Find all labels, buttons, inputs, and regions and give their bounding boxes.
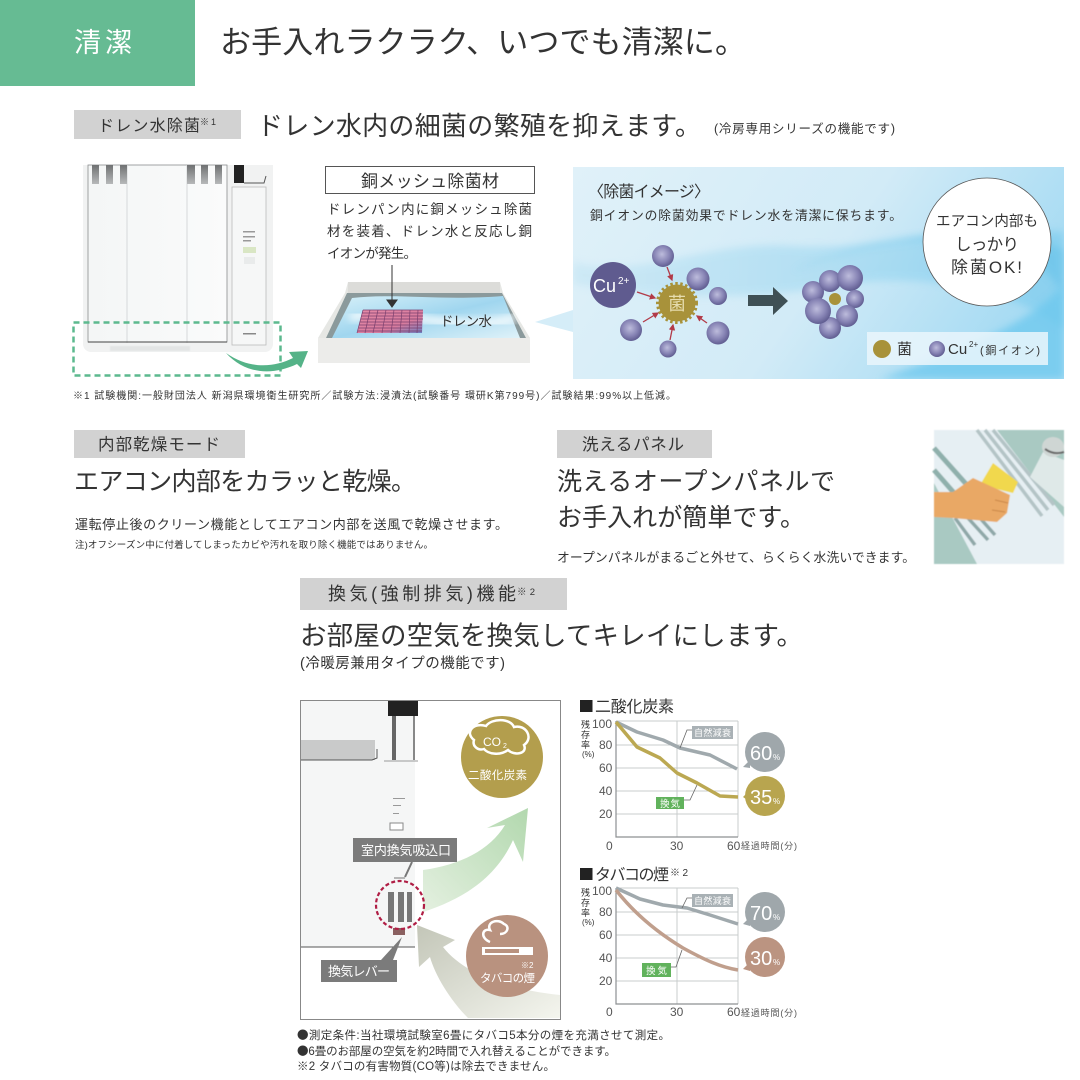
axis label: residual rate: 率	[581, 908, 590, 918]
icon: cigarette smoke circle: ※2	[521, 961, 534, 970]
icon: cigarette smoke circle: タバコの煙	[480, 972, 536, 985]
axis numbers	[592, 884, 797, 1019]
drying body text: 運転停止後のクリーン機能としてエアコン内部を送風で乾燥させます。	[75, 517, 508, 532]
icon: CO2 circle: 二酸化炭素	[468, 768, 527, 782]
axis label: residual rate	[581, 887, 595, 927]
axis numbers: 80	[599, 905, 613, 919]
axis label: residual rate: 残	[581, 887, 590, 898]
caption: copper ions: 銅イオンの除菌効果でドレン水を清潔に保ちます。	[590, 208, 902, 223]
tag: natural decay: 自然減衰	[694, 727, 731, 738]
green exhaust arrow	[423, 808, 528, 912]
axis numbers: 20	[599, 974, 613, 988]
tag: ventilation: 換気	[646, 965, 667, 977]
bubble: 70%	[743, 892, 785, 932]
box: copper mesh: 銅メッシュ除菌材	[361, 172, 499, 191]
legend: Cu	[948, 341, 967, 358]
axis numbers: 経過時間(分)	[741, 840, 797, 851]
copper ion large	[590, 262, 636, 308]
icon: CO2 circle: CO	[483, 735, 501, 749]
tag: natural decay	[680, 726, 733, 748]
header band: 清潔: 清潔	[74, 28, 132, 58]
axis numbers	[592, 717, 797, 853]
germ with ions: 菌	[668, 294, 686, 314]
axis numbers: 100	[592, 717, 612, 731]
footnotes: measurement conditions: ※2 タバコの有害物質(CO等)は除去できません。	[297, 1059, 555, 1073]
panel: sterilization image	[535, 167, 1064, 379]
tag: 洗えるパネル: 洗えるパネル	[582, 435, 684, 454]
green arrow to drain pan	[226, 351, 308, 371]
label: lever	[321, 937, 402, 982]
bubble: 70%: 70	[750, 903, 772, 925]
tag: ventilation function: 換気(強制排気)機能	[328, 584, 516, 604]
axis numbers: 30	[670, 1005, 684, 1019]
drying note: 注)オフシーズン中に付着してしまったカビや汚れを取り除く機能ではありません。	[75, 539, 433, 551]
tag: natural decay: 自然減衰	[694, 895, 731, 906]
axis label: residual rate: (%)	[582, 750, 595, 759]
icon: cigarette smoke circle	[466, 915, 548, 997]
bubble: 70%: %	[773, 913, 780, 922]
bubble: 30%: %	[773, 958, 780, 967]
copper mesh description	[327, 202, 532, 261]
tag: ventilation function: ※2	[517, 587, 535, 598]
footnotes: measurement conditions: ●6畳のお部屋の空気を約2時間で入れ替えることができます。	[297, 1043, 616, 1059]
water wave	[573, 230, 1064, 379]
drain pan illustration	[318, 265, 530, 363]
dashed highlight	[74, 322, 280, 376]
bubble: 30%: 30	[750, 948, 772, 970]
axis label: residual rate: 存	[581, 897, 590, 908]
line: natural decay	[616, 888, 738, 924]
box: copper mesh	[326, 166, 534, 194]
bubble: 35%	[743, 776, 785, 816]
speech circle: エアコン内部も	[936, 213, 1038, 230]
copper mesh grid	[357, 310, 423, 333]
section: drain water sterilization	[73, 110, 1064, 402]
axis label: residual rate	[581, 719, 595, 759]
tag: 洗えるパネル	[557, 430, 712, 458]
section: internal drying mode	[74, 430, 508, 551]
chart title: smoke	[580, 866, 688, 884]
header band: 清潔	[0, 0, 195, 86]
label: lever: 換気レバー	[328, 964, 390, 979]
axis numbers: 30	[670, 839, 684, 853]
tag: natural decay	[682, 894, 733, 908]
tag: ドレン水除菌: ※1	[200, 117, 216, 127]
section: washable panel	[557, 430, 1064, 565]
chart: carbon dioxide	[580, 698, 797, 853]
axis numbers: 40	[599, 951, 613, 965]
axis numbers: 100	[592, 884, 612, 898]
icon: CO2 circle	[461, 716, 543, 798]
line: natural decay	[616, 722, 737, 769]
label: intake	[353, 838, 457, 877]
label: drain water: ドレン水	[440, 314, 492, 329]
speech circle: 除菌OK!	[951, 258, 1022, 277]
tag: ドレン水除菌	[74, 110, 241, 139]
germ with ions	[620, 245, 730, 358]
tag: ventilation function	[300, 578, 567, 610]
tag: ventilation: 換気	[660, 798, 680, 810]
tag: 内部乾燥モード	[74, 430, 245, 458]
axis label: residual rate: 率	[581, 740, 590, 750]
legend: 菌	[897, 341, 912, 358]
tag: ventilation	[656, 785, 697, 810]
heading: washable panel: 洗えるオープンパネルで	[557, 468, 835, 496]
axis numbers: 20	[599, 807, 613, 821]
bubble: 35%: %	[773, 797, 780, 806]
copper mesh description: 材を装着、ドレン水と反応し銅	[327, 223, 532, 239]
legend	[867, 332, 1048, 365]
bubble: 30%	[743, 937, 785, 977]
air conditioner front illustration	[83, 165, 273, 352]
axis numbers: 60	[727, 839, 741, 853]
bubble: 60%: %	[773, 753, 780, 762]
footnotes: measurement conditions: ●測定条件:当社環境試験室6畳にタバコ5本分の煙を充満させて測定。	[297, 1027, 670, 1043]
gray intake arrow	[417, 925, 560, 1018]
cooling-only note: (冷房専用シリーズの機能です)	[714, 121, 895, 136]
line: ventilation	[616, 890, 738, 970]
washable body text: オープンパネルがまるごと外せて、らくらく水洗いできます。	[557, 550, 915, 565]
heading: sterilization image: 〈除菌イメージ〉	[588, 183, 710, 201]
line: ventilation	[616, 722, 738, 797]
reaction arrow	[748, 287, 788, 315]
heading: ventilation: お部屋の空気を換気してキレイにします。	[300, 621, 803, 651]
grid and axes	[616, 888, 738, 1004]
label: intake: 室内換気吸込口	[361, 843, 451, 858]
axis numbers: 60	[599, 928, 613, 942]
bubble: 35%: 35	[750, 787, 772, 809]
tag: ドレン水除菌: ドレン水除菌	[98, 117, 200, 135]
speech circle	[923, 178, 1051, 306]
chart title: smoke: ※2	[670, 868, 688, 879]
axis numbers: 経過時間(分)	[741, 1007, 797, 1018]
legend: 2+	[969, 340, 978, 349]
speech circle: しっかり	[955, 236, 1019, 254]
footnote 1: ※1 試験機関:一般財団法人 新潟県環境衛生研究所／試験方法:浸漬法(試験番号 環研K第799号)／試験結果:99%以上低減。	[73, 389, 676, 402]
chart: tobacco smoke	[580, 866, 797, 1019]
tag: ventilation	[642, 950, 682, 977]
bubble: 60%	[743, 732, 785, 772]
heading: washable panel	[557, 468, 835, 532]
axis numbers: 40	[599, 784, 613, 798]
chart title: CO2: 二酸化炭素	[595, 698, 674, 716]
copper mesh description: イオンが発生。	[327, 246, 417, 261]
axis numbers: 0	[606, 1005, 613, 1019]
axis label: residual rate: 残	[581, 719, 590, 730]
heading: drain water: ドレン水内の細菌の繁殖を抑えます。	[257, 111, 701, 141]
footnotes: measurement conditions	[297, 1027, 670, 1073]
tag: 内部乾燥モード: 内部乾燥モード	[98, 435, 220, 454]
legend: (銅イオン)	[980, 343, 1040, 357]
chart title: smoke: タバコの煙	[595, 866, 669, 884]
heating-cooling note: (冷暖房兼用タイプの機能です)	[300, 655, 505, 672]
copper ion large: 2+	[618, 276, 630, 287]
grid and axes	[616, 721, 738, 837]
axis numbers: 0	[606, 839, 613, 853]
section: ventilation	[297, 578, 803, 1073]
axis numbers: 60	[727, 1005, 741, 1019]
air conditioner side	[301, 701, 418, 947]
copper mesh description: ドレンパン内に銅メッシュ除菌	[327, 202, 532, 217]
axis numbers: 60	[599, 761, 613, 775]
pointer arrow to mesh	[387, 265, 397, 307]
heading: washable panel: お手入れが簡単です。	[557, 504, 805, 532]
panel: airflow illustration	[300, 700, 560, 1020]
heading: drying: エアコン内部をカラッと乾燥。	[74, 468, 416, 496]
copper ion large: Cu	[593, 276, 616, 296]
bubble: 60%: 60	[750, 743, 772, 765]
axis label: residual rate: 存	[581, 729, 590, 740]
ion cluster	[802, 265, 864, 339]
axis numbers: 80	[599, 738, 613, 752]
photo: washing panel	[934, 430, 1064, 564]
icon: CO2 circle: 2	[503, 743, 507, 750]
main title: お手入れラクラク、いつでも清潔に。	[220, 25, 746, 60]
axis label: residual rate: (%)	[582, 918, 595, 927]
red dashed circle	[376, 881, 424, 929]
